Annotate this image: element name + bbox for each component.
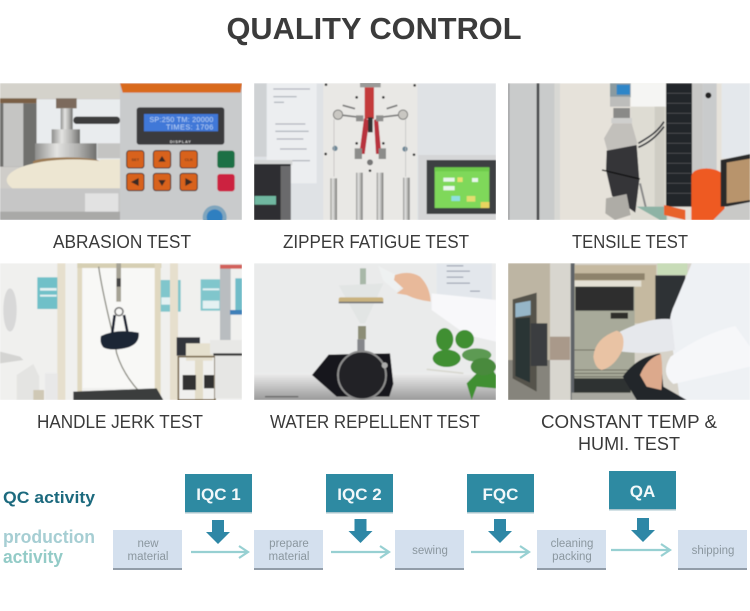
photo: abrasion tester: SP:250 TM: 20000 <box>149 115 213 124</box>
row label: QC activity: QC activity <box>3 488 96 507</box>
photo: water repellent tester <box>254 263 497 400</box>
arrow: sewing to cleaning packing <box>471 546 529 558</box>
photo: abrasion tester: SET <box>131 157 140 162</box>
arrow: QA down <box>631 518 655 542</box>
arrow: prepare material to sewing <box>331 546 389 558</box>
label: CONSTANT TEMP & <box>541 412 717 432</box>
process: cleaning packing: packing <box>552 551 592 563</box>
QC box: QA: QA <box>630 482 655 501</box>
panel: handle jerk test <box>0 263 242 432</box>
row label: production activity <box>3 527 95 567</box>
arrow: FQC down <box>488 519 512 543</box>
photo: tensile tester <box>508 83 750 220</box>
process: new material: material <box>128 551 168 563</box>
QC box: IQC 2 <box>326 474 393 514</box>
process: prepare material <box>254 530 323 570</box>
label: ZIPPER FATIGUE TEST <box>283 232 469 252</box>
label: TENSILE TEST <box>572 232 688 252</box>
panel: constant temperature and humidity test <box>508 263 750 454</box>
process: shipping: shipping <box>692 545 734 557</box>
process: new material <box>113 530 182 570</box>
QC box: IQC 1 <box>185 474 252 514</box>
arrow: cleaning packing to shipping <box>611 544 670 556</box>
label: ABRASION TEST <box>53 232 191 252</box>
arrow: new material to prepare material <box>191 546 248 558</box>
process: prepare material: material <box>269 551 309 563</box>
photo: abrasion tester <box>0 83 242 229</box>
QC box: QA <box>609 471 676 510</box>
arrow: IQC 1 down <box>206 520 230 544</box>
process: new material: new <box>137 538 159 550</box>
process: prepare material: prepare <box>269 538 309 550</box>
photo: climate chamber <box>508 263 750 400</box>
flowchart: QC process <box>3 471 747 570</box>
process: sewing: sewing <box>412 545 448 557</box>
panel: tensile test <box>508 83 750 252</box>
label line 2: HUMI. TEST <box>578 434 680 454</box>
panel: water repellent test <box>254 263 497 432</box>
photo: zipper fatigue tester <box>254 83 496 220</box>
panel: abrasion test <box>0 83 242 252</box>
process: shipping <box>678 530 747 570</box>
photo: abrasion tester: DISPLAY <box>170 139 191 144</box>
arrow: IQC 2 down <box>348 519 372 543</box>
process: sewing <box>395 530 464 570</box>
QC box: FQC: FQC <box>483 485 518 504</box>
process: cleaning packing: cleaning <box>551 538 593 550</box>
title: QUALITY CONTROL <box>226 11 522 46</box>
QC box: IQC 1: IQC 1 <box>196 485 241 504</box>
photo: handle jerk tester <box>0 263 242 400</box>
row label: production activity: activity <box>3 547 63 567</box>
label: HANDLE JERK TEST <box>37 412 203 432</box>
QC box: FQC <box>467 474 534 514</box>
photo: abrasion tester: CLR <box>185 157 193 162</box>
label: WATER REPELLENT TEST <box>270 412 480 432</box>
QC box: IQC 2: IQC 2 <box>337 485 382 504</box>
photo: abrasion tester: TIMES: 1706 <box>166 122 213 131</box>
process: cleaning packing <box>537 530 606 570</box>
panel: zipper fatigue test <box>254 83 496 252</box>
row label: production activity: production <box>3 527 95 547</box>
